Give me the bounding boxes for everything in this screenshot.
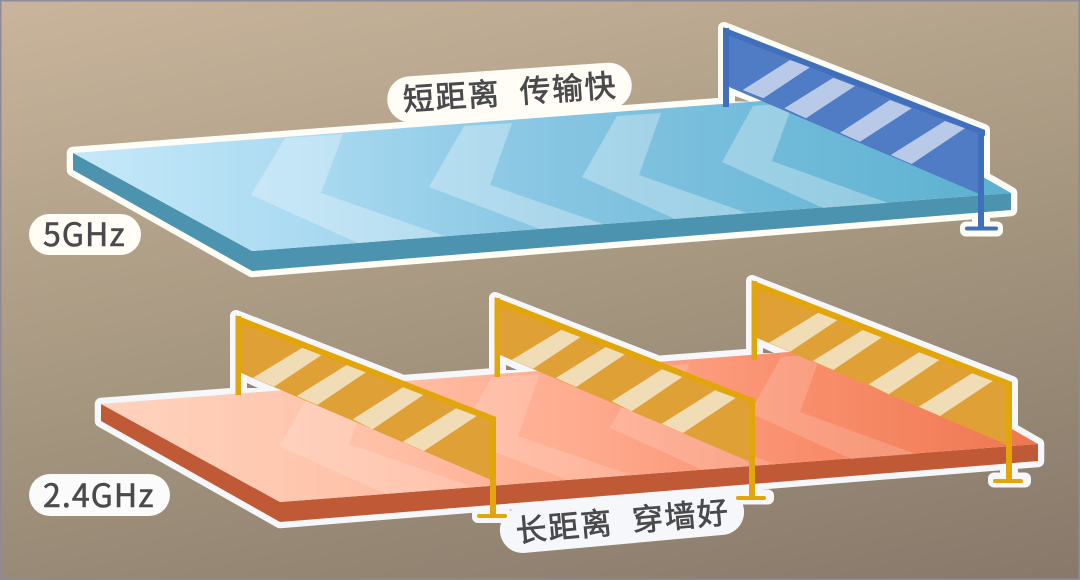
orange barrier 3 <box>752 280 1023 483</box>
blue barrier <box>723 27 998 230</box>
chevron arrows <box>251 103 888 243</box>
orange barrier 1 <box>236 315 507 518</box>
label: long range, good wall penetration: 长距离 穿墙好 <box>513 487 731 551</box>
white outline: orange plate <box>101 346 1038 522</box>
2.4GHz plate <box>101 346 1038 522</box>
5GHz plate <box>73 95 1011 271</box>
plate top surface <box>101 346 1038 502</box>
plate side <box>101 404 1038 522</box>
white outline: orange barrier 1 <box>236 316 505 517</box>
gaps in orange barriers <box>247 348 774 388</box>
plate side <box>73 153 1011 271</box>
label: short range, fast transfer: 短距离 传输快 <box>401 60 618 120</box>
white outline: blue plate <box>73 95 1011 271</box>
plate top surface <box>73 95 1011 251</box>
barrier frame and post <box>723 27 998 230</box>
barrier panel <box>724 28 984 196</box>
chevron arrows <box>279 354 916 494</box>
barrier stripes <box>743 60 965 164</box>
white outline: blue barrier <box>724 28 997 230</box>
label: 2.4GHz: 2.4GHz <box>43 471 155 517</box>
gap in blue barrier <box>735 96 750 102</box>
label: 5GHz: 5GHz <box>43 210 126 256</box>
orange barrier 2 <box>494 297 766 500</box>
white outline: orange barrier 2 <box>495 298 768 498</box>
white outline: orange barrier 3 <box>752 281 1025 482</box>
